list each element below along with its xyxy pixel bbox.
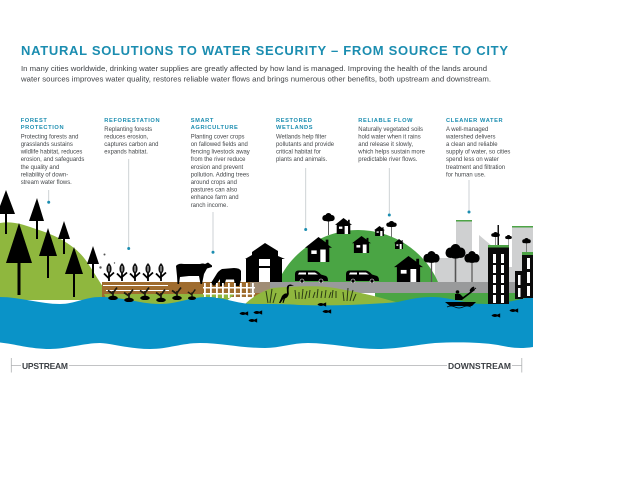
seeds in air	[99, 254, 115, 269]
column: forest protection: wildlife habitat, reduces	[20, 150, 82, 156]
column: smart agriculture: pastures can also	[191, 188, 238, 194]
column: forest protection: FOREST	[21, 118, 47, 124]
title: NATURAL SOLUTIONS TO WATER SECURITY – FROM SOURCE TO CITY	[21, 43, 508, 58]
column: restored wetlands: plants and animals.	[276, 157, 328, 163]
dark green riverbank	[375, 293, 533, 307]
column: reliable flow: Naturally vegetated soils	[358, 127, 423, 133]
column: smart agriculture: pollution. Adding trees	[191, 172, 249, 178]
column: smart agriculture: ranch income.	[191, 203, 228, 209]
column: smart agriculture: SMART	[191, 118, 214, 124]
column: restored wetlands	[276, 118, 335, 163]
column: cleaner water: a clean and reliable	[446, 142, 498, 148]
column: reforestation	[104, 118, 160, 156]
hill and city trees	[322, 213, 480, 282]
column: forest protection: reliability of down-	[21, 172, 68, 178]
cow grazing	[211, 268, 241, 286]
column: restored wetlands: WETLANDS	[276, 125, 313, 131]
pointer: smart agriculture	[212, 212, 214, 254]
houses on hill	[305, 218, 423, 282]
column: reliable flow: which helps sustain more	[357, 150, 426, 156]
seedlings	[108, 288, 196, 302]
pointer: forest protection	[47, 190, 50, 204]
column: forest protection: PROTECTION	[21, 125, 64, 131]
column: smart agriculture: erosion and prevent	[191, 165, 244, 171]
column: restored wetlands: critical habitat for	[276, 150, 321, 156]
column: cleaner water: for human use.	[446, 172, 486, 178]
column: smart agriculture: from the river reduce	[191, 157, 246, 163]
column: smart agriculture: fencing livestock away	[191, 150, 250, 156]
upstream downstream axis: DOWNSTREAM	[448, 361, 511, 371]
intro paragraph: In many cities worldwide, drinking water supplies are greatly affected by how land is managed. Improving the health of the lands around	[21, 64, 487, 73]
column: reliable flow: and release it slowly,	[358, 142, 413, 148]
cars	[295, 270, 379, 283]
column: forest protection: stream water flows.	[21, 180, 72, 186]
column: cleaner water	[445, 118, 510, 178]
column: forest protection: the quality and	[21, 165, 59, 171]
column: smart agriculture	[191, 118, 250, 209]
intro paragraph	[20, 64, 491, 84]
column: smart agriculture: on fallowed fields and	[191, 142, 248, 148]
column: restored wetlands: Wetlands help filter	[276, 134, 326, 140]
grey city skyline	[435, 220, 533, 282]
column: reliable flow: RELIABLE FLOW	[358, 118, 413, 124]
column: reliable flow: hold water when it rains	[358, 134, 421, 140]
white fence	[203, 283, 255, 300]
column: forest protection: grasslands sustains	[21, 142, 73, 148]
heron	[279, 284, 294, 303]
light green riverbank	[104, 286, 399, 310]
column: smart agriculture: enhance farm and	[191, 195, 239, 201]
pointer: restored wetlands	[304, 168, 307, 231]
pointer: cleaner water	[468, 180, 470, 214]
wetland reeds	[266, 288, 356, 303]
column: cleaner water: CLEANER WATER	[446, 118, 503, 124]
column: smart agriculture: AGRICULTURE	[191, 125, 238, 131]
column: reforestation: reduces erosion,	[104, 134, 149, 140]
grey road	[270, 282, 533, 293]
field furrows	[103, 286, 169, 290]
dark green hill	[278, 230, 438, 282]
pointer: reliable flow	[388, 168, 391, 216]
column: cleaner water: supply of water, so cities	[446, 150, 510, 156]
upstream downstream axis	[11, 358, 522, 372]
column: restored wetlands: pollutants and provide	[276, 142, 335, 148]
fish	[239, 302, 518, 323]
kayaker	[445, 286, 476, 308]
column: reforestation: Replanting forests	[104, 127, 152, 133]
column: cleaner water: watershed delivers	[445, 134, 496, 140]
column: forest protection	[20, 118, 84, 186]
column: cleaner water: treatment and filtration	[446, 165, 505, 171]
corn crops	[104, 263, 166, 281]
column: reliable flow	[357, 118, 426, 163]
pointer: reforestation	[127, 159, 130, 250]
river	[0, 296, 533, 349]
column: reliable flow: predictable river flows.	[358, 157, 418, 163]
light green forest hill	[0, 222, 110, 300]
column: restored wetlands: RESTORED	[276, 118, 312, 124]
cow standing	[176, 262, 212, 284]
column: forest protection: erosion, and safeguards	[21, 157, 84, 163]
forest trees	[0, 190, 99, 297]
column: smart agriculture: around crops and	[191, 180, 237, 186]
column: reforestation: REFORESTATION	[104, 118, 160, 124]
column: cleaner water: spend less on water	[446, 157, 499, 163]
black high-rise buildings	[488, 225, 533, 304]
upstream downstream axis: UPSTREAM	[22, 361, 68, 371]
column: cleaner water: A well-managed	[446, 127, 488, 133]
column: reforestation: expands habitat.	[104, 150, 148, 156]
column: reforestation: captures carbon and	[104, 142, 158, 148]
column: forest protection: Protecting forests and	[21, 134, 78, 140]
intro paragraph: water sources improves water quality, restores reliable water flows and brings numerous other benefits, both upstream and downstream.	[20, 74, 491, 84]
barn	[245, 243, 285, 282]
ground strip near barn	[250, 282, 272, 293]
column: smart agriculture: Planting cover crops	[191, 134, 245, 140]
brown farm field	[102, 282, 270, 297]
